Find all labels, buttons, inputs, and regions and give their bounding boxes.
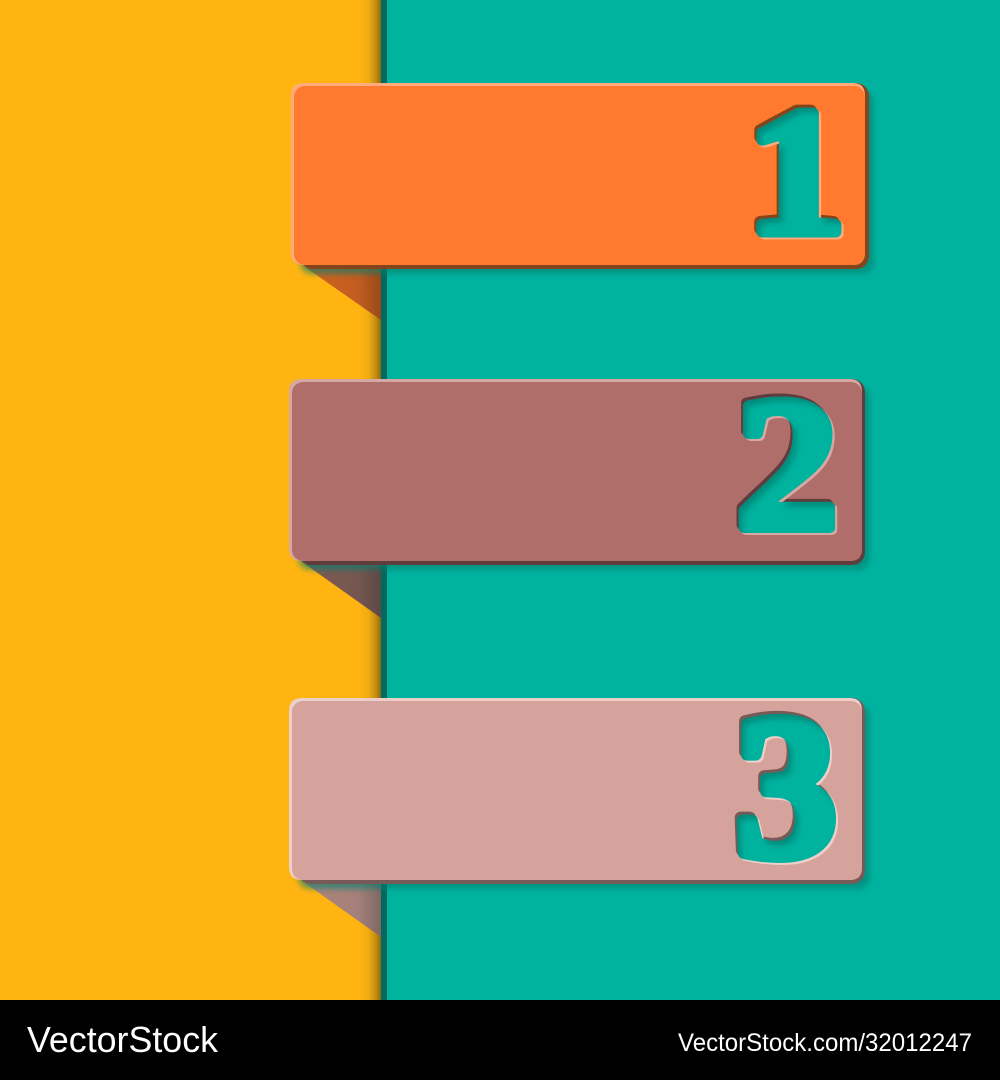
number 2 cutout: 2 bbox=[738, 360, 841, 571]
panel: teal background bbox=[381, 0, 1000, 1000]
number 3 cutout: 3 bbox=[737, 676, 839, 902]
number 3 cutout: 3 bbox=[735, 674, 837, 900]
watermark bar bbox=[0, 1000, 1000, 1080]
number 1 cutout: 1 bbox=[749, 73, 848, 273]
number 3 cutout: 3 bbox=[733, 671, 835, 897]
dark teal fold strip bbox=[381, 0, 387, 1000]
ribbon fold 3 bbox=[305, 883, 381, 937]
panel 2: mauve card bbox=[289, 355, 870, 571]
panel 3: pink card bbox=[289, 671, 870, 902]
number 1 cutout: 1 bbox=[744, 68, 843, 268]
wall shadow on yellow bbox=[358, 0, 381, 1000]
ribbon fold 1 bbox=[305, 267, 381, 320]
panel: yellow background bbox=[0, 0, 381, 1000]
number 1 cutout: 1 bbox=[747, 71, 846, 271]
number 2 cutout: 2 bbox=[735, 358, 839, 569]
ribbon fold 2 bbox=[305, 564, 381, 618]
watermark image id: VectorStock.com/32012247 bbox=[678, 1029, 972, 1057]
watermark logo text: VectorStock bbox=[27, 1019, 219, 1060]
number 2 cutout: 2 bbox=[733, 355, 836, 566]
panel 1: orange card bbox=[291, 68, 874, 274]
